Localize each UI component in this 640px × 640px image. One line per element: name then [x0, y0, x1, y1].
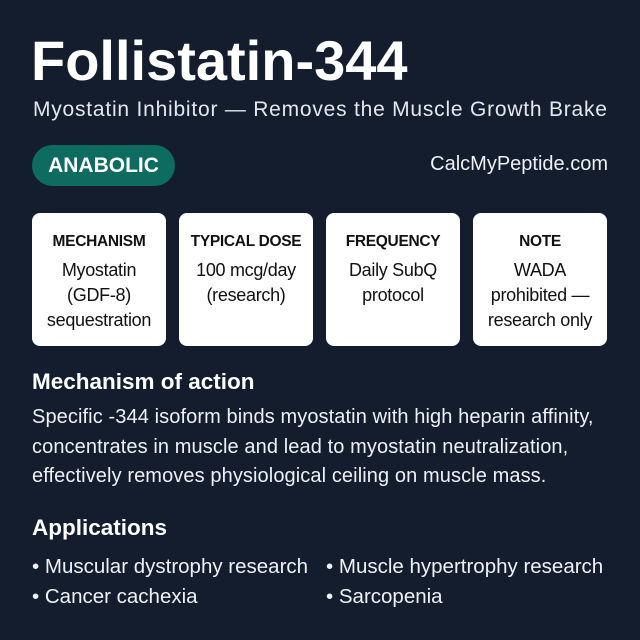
- card: typical dose: (research): [206, 285, 286, 305]
- website: CalcMyPeptide.com: [430, 153, 608, 175]
- card: mechanism: Myostatin: [62, 260, 136, 280]
- card: note: NOTE: [519, 233, 561, 250]
- card: typical dose: TYPICAL DOSE: [191, 233, 301, 250]
- subtitle: Myostatin Inhibitor — Removes the Muscle Growth Brake: [33, 98, 608, 121]
- list: applications: • Muscular dystrophy research: [32, 555, 308, 578]
- heading: mechanism of action: Mechanism of action: [32, 369, 255, 394]
- badge: anabolic: [32, 145, 175, 186]
- card: mechanism: (GDF-8): [67, 285, 131, 305]
- paragraph: mechanism: concentrates in muscle and lead to myostatin neutralization,: [32, 436, 568, 458]
- card: note: [473, 213, 607, 346]
- paragraph: mechanism: effectively removes physiological ceiling on muscle mass.: [32, 465, 546, 487]
- list: applications: • Cancer cachexia: [32, 585, 198, 608]
- card: note: prohibited —: [491, 285, 589, 305]
- list: applications: • Muscle hypertrophy research: [326, 555, 603, 578]
- card: typical dose: [179, 213, 313, 346]
- card: note: research only: [488, 310, 592, 330]
- card: typical dose: 100 mcg/day: [196, 260, 296, 280]
- card: frequency: protocol: [362, 285, 424, 305]
- card: note: WADA: [514, 260, 566, 280]
- card: mechanism: MECHANISM: [53, 233, 145, 250]
- badge: anabolic: ANABOLIC: [48, 154, 159, 177]
- list: applications: [32, 555, 603, 608]
- heading: applications: Applications: [32, 515, 167, 540]
- paragraph: mechanism: [32, 406, 594, 487]
- paragraph: mechanism: Specific -344 isoform binds myostatin with high heparin affinity,: [32, 406, 594, 428]
- title: Follistatin-344: [31, 29, 408, 92]
- card: frequency: [326, 213, 460, 346]
- card: mechanism: sequestration: [47, 310, 151, 330]
- list: applications: • Sarcopenia: [326, 585, 443, 608]
- card: mechanism: [32, 213, 166, 346]
- card: frequency: Daily SubQ: [349, 260, 437, 280]
- card: frequency: FREQUENCY: [346, 233, 440, 250]
